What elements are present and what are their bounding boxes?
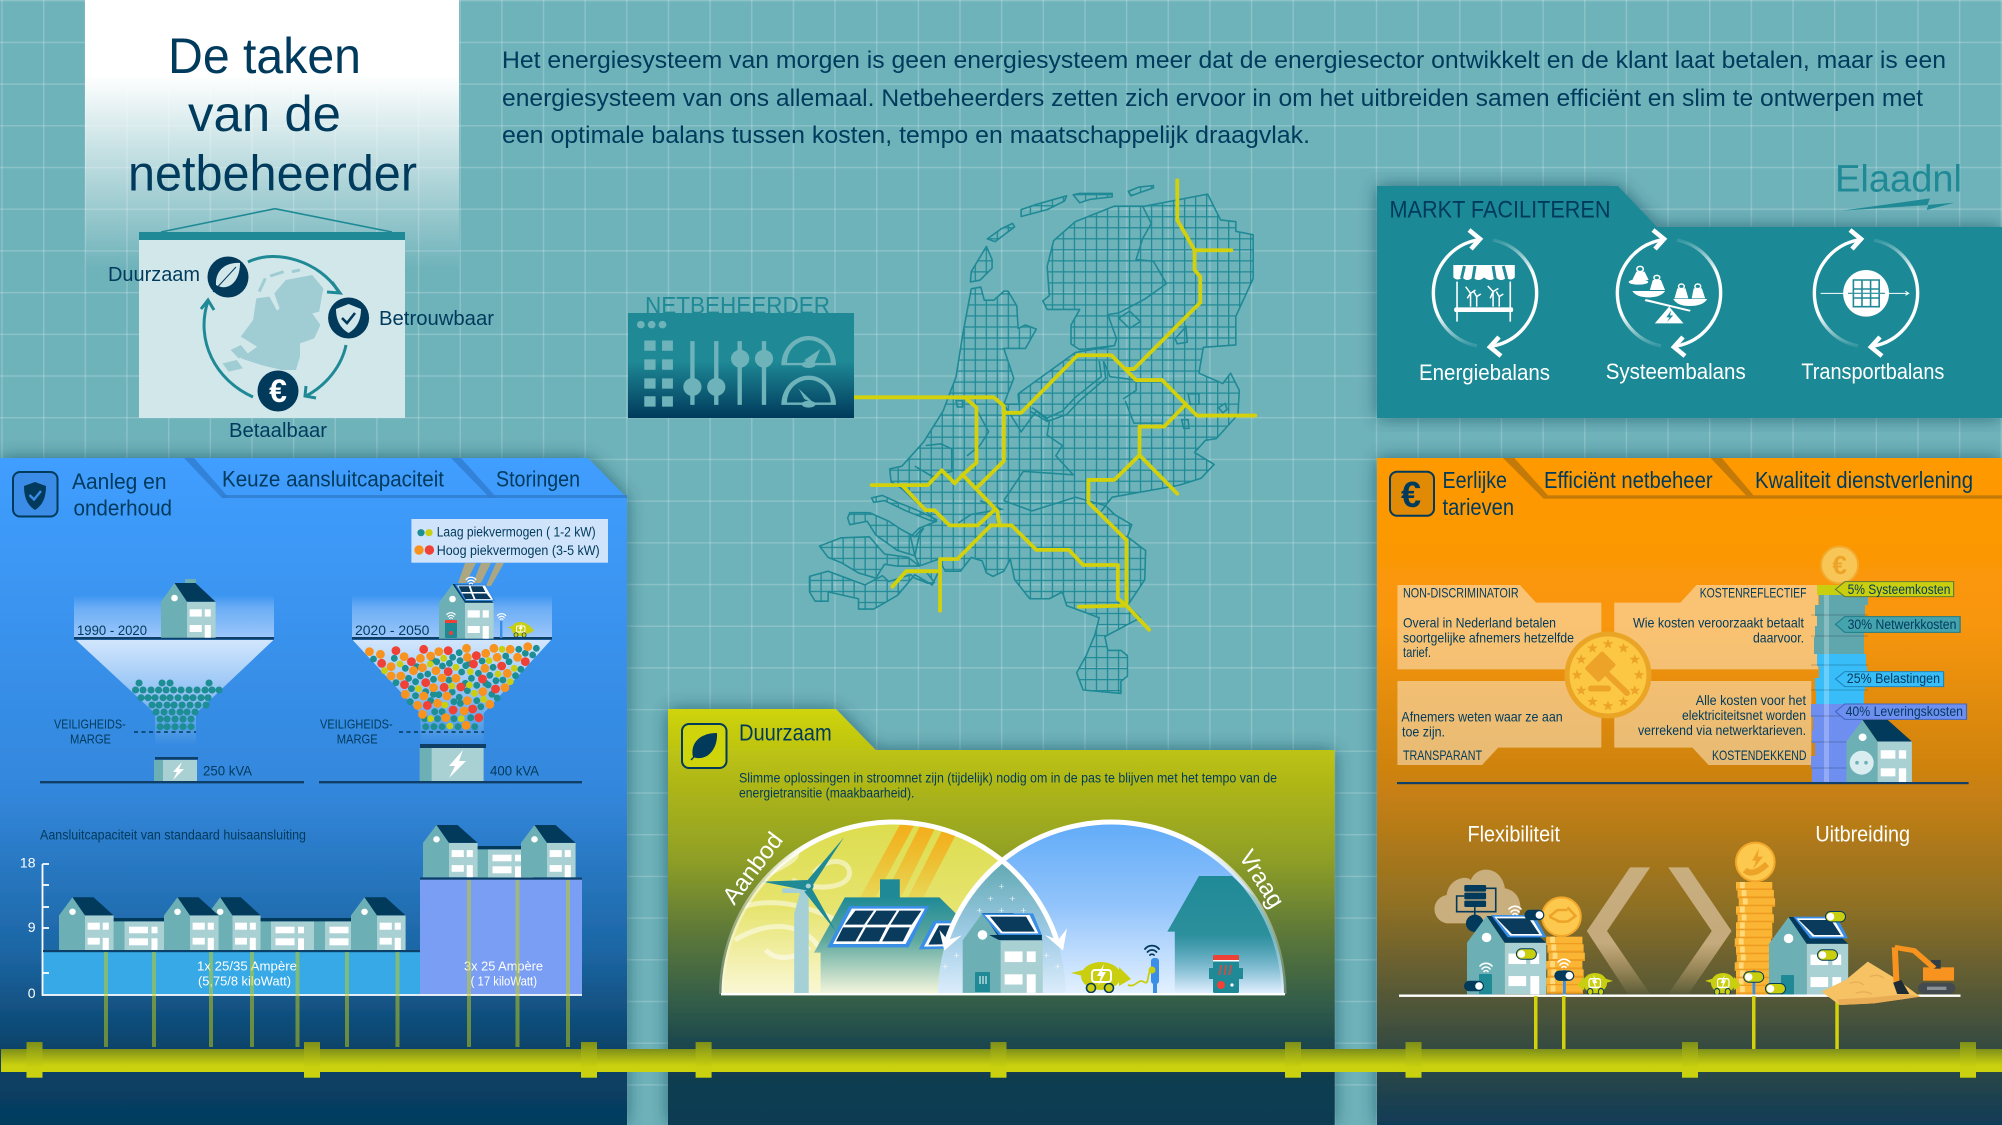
labels: 400 kVA — [490, 762, 540, 778]
left house heater and charger — [1479, 959, 1613, 996]
body text: Slimme oplossingen in stroomnet zijn (tijdelijk) nodig om in de pas te blijven met het tempo van de — [739, 770, 1277, 786]
bar: 3x 25 Ampere: 3x 25 Ampère — [464, 959, 543, 974]
house with socket — [1846, 720, 1912, 783]
cost labels: 40% Leveringskosten — [1846, 704, 1963, 719]
dots — [136, 683, 219, 727]
icon: transportbalans grid — [1814, 230, 1918, 356]
logo: Elaadnl: Elaadnl — [1835, 158, 1962, 200]
labels: Transportbalans — [1801, 359, 1944, 384]
card: kostendekkend: verrekend via netwerktarieven. — [1638, 722, 1806, 738]
tab headings: Kwaliteit dienstverlening — [1755, 467, 1973, 493]
chart: aansluitcapaciteit — [20, 825, 582, 1047]
tab shading — [1503, 458, 2002, 499]
dome overlap — [938, 864, 1065, 993]
large house silhouette — [1167, 876, 1294, 993]
title panel — [85, 0, 459, 268]
axis — [20, 854, 582, 1001]
labels — [320, 622, 540, 778]
car and charger — [1071, 946, 1159, 994]
title heading: netbeheerder — [128, 146, 417, 202]
labels: VEILIGHEIDS- — [320, 717, 393, 732]
intro text: Het energiesysteem van morgen is geen energiesysteem meer dat de energiesector ontwikkelt en de klant laat betalen, maar is een — [502, 47, 1946, 74]
underground pipe — [1, 1042, 2002, 1078]
card: non-discriminatoir: tarief. — [1403, 644, 1431, 660]
dome arcs and arrows — [721, 822, 1285, 995]
panel: markt faciliteren — [1377, 186, 2002, 418]
sand pile and excavator — [1821, 947, 1955, 1005]
card: kostendekkend: elektriciteitsnet worden — [1682, 707, 1806, 723]
house with solar roof — [814, 879, 959, 993]
Netherlands grid map — [810, 185, 1253, 693]
card: kostendekkend — [1638, 692, 1806, 763]
tab headings: Efficiënt netbeheer — [1544, 467, 1713, 493]
tab headings: onderhoud — [74, 496, 172, 520]
icon: leaf — [208, 256, 248, 298]
labels: 2020 - 2050 — [355, 622, 430, 638]
tab headings: Aanleg en — [72, 469, 166, 494]
cloud with server — [1434, 870, 1520, 932]
intro text: energiesysteem van ons allemaal. Netbeheerders zetten zich ervoor in om het uitbreiden samen efficiënt en slim te ontwerpen met — [502, 85, 1923, 112]
top euro coin: € — [1832, 550, 1847, 580]
legend — [411, 519, 608, 586]
pipe flanges — [26, 1042, 1976, 1078]
icon: euro badge — [1390, 472, 1434, 516]
heater — [445, 613, 457, 638]
connectors — [1534, 996, 1839, 1049]
labels: MARGE — [337, 731, 378, 746]
dots — [369, 647, 536, 727]
chevrons and cloud — [1434, 843, 1775, 994]
labels: Duurzaam — [108, 264, 200, 286]
card: transparant: TRANSPARANT — [1403, 747, 1482, 763]
icon: cost stack — [1811, 546, 1868, 783]
card: non-discriminatoir: NON-DISCRIMINATOIR — [1403, 584, 1519, 600]
icon: gavel coin — [1564, 632, 1652, 718]
legend: Laag piekvermogen ( 1-2 kW) — [437, 524, 596, 540]
tab headings: Eerlijke — [1442, 467, 1507, 493]
card: transparant: Afnemers weten waar ze aan — [1401, 708, 1563, 724]
labels: 250 kVA — [203, 762, 253, 778]
axis: 18 — [20, 854, 36, 870]
icon: euro: € — [269, 373, 287, 409]
tab headings — [72, 466, 580, 520]
panel: eerlijke tarieven (orange) — [1377, 458, 2002, 1125]
cycle arrows — [201, 257, 346, 398]
right coin stack — [1735, 843, 1775, 994]
card: non-discriminatoir: Overal in Nederland betalen — [1403, 614, 1556, 630]
panel: duurzaam (olive) — [668, 709, 1335, 1125]
house diagram: duurzaam, betrouwbaar, betaalbaar — [108, 209, 494, 442]
axis: 0 — [28, 985, 36, 1001]
flexibiliteit vs uitbreiding — [1399, 822, 1960, 1049]
labels — [108, 264, 494, 442]
tab headings: tarieven — [1442, 494, 1514, 520]
wind turbine — [762, 837, 844, 993]
labels: Energiebalans — [1419, 360, 1550, 385]
right house — [1705, 917, 1848, 996]
funnel 2020-2050 — [319, 577, 582, 783]
curved labels — [717, 827, 1290, 913]
heater — [1209, 955, 1243, 993]
panel: netbeheerder control desk — [628, 292, 854, 418]
card: kostendekkend: Alle kosten voor het — [1696, 692, 1806, 708]
car and charger — [497, 614, 534, 638]
transformer — [420, 744, 486, 781]
bar: 1x 25/35 Ampere: 1x 25/35 Ampère — [197, 959, 297, 974]
labels — [54, 622, 253, 778]
card: transparant — [1401, 708, 1563, 763]
bar: 3x 25 Ampere — [420, 879, 582, 994]
labels — [1419, 359, 1944, 385]
small Netherlands map — [222, 270, 323, 372]
labels: VEILIGHEIDS- — [54, 717, 126, 732]
labels: MARGE — [70, 731, 111, 746]
bar: 3x 25 Ampere: ( 17 kiloWatt) — [471, 974, 537, 989]
labels: 1990 - 2020 — [77, 622, 147, 638]
bar: 1x 25/35 Ampere: (5,75/8 kiloWatt) — [198, 974, 291, 989]
cards — [1397, 585, 1818, 765]
tab headings: Storingen — [496, 466, 580, 492]
card: non-discriminatoir: soortgelijke afnemers hetzelfde — [1403, 630, 1574, 646]
card: kostenreflectief — [1633, 584, 1806, 646]
icon: euro — [258, 370, 298, 412]
card: transparant: toe zijn. — [1402, 724, 1445, 740]
axis: 9 — [28, 919, 36, 935]
curved labels: Vraag — [1233, 845, 1290, 913]
panel: aanleg en onderhoud (blue) — [0, 458, 627, 1125]
title heading — [128, 28, 417, 202]
labels: Betrouwbaar — [379, 308, 494, 330]
street of 3x houses — [423, 825, 576, 878]
cost labels — [1836, 582, 1967, 719]
intro text: een optimale balans tussen kosten, tempo en maatschappelijk draagvlak. — [502, 122, 1310, 149]
dome: vraag — [936, 818, 1294, 996]
cost labels: 5% Systeemkosten — [1848, 582, 1950, 597]
icon: euro badge: € — [1401, 474, 1421, 515]
headings — [1468, 822, 1910, 846]
headings: Flexibiliteit — [1468, 822, 1560, 846]
chimney and house — [161, 579, 216, 638]
bar: 1x 25/35 Ampere — [43, 951, 420, 994]
body text: energietransitie (maakbaarheid). — [739, 786, 914, 800]
legend: Hoog piekvermogen (3-5 kW) — [437, 543, 600, 558]
icon: systeembalans scale — [1617, 230, 1721, 356]
sun rays — [860, 825, 955, 898]
middle house with solar panel — [963, 913, 1043, 993]
ground line — [1399, 994, 1960, 997]
card: kostenreflectief: daarvoor. — [1753, 630, 1804, 646]
funnel 1990-2020 — [40, 579, 304, 783]
intro text — [502, 47, 1946, 149]
labels: Betaalbaar — [229, 420, 327, 442]
tab shading — [184, 458, 627, 498]
curved labels: Aanbod — [717, 827, 789, 910]
dome: aanbod — [722, 824, 998, 993]
card: kostendekkend: KOSTENDEKKEND — [1712, 747, 1806, 763]
panel heading: MARKT FACILITEREN — [1390, 196, 1610, 224]
connector lines — [104, 880, 570, 1047]
transformer — [154, 757, 198, 781]
icon: shield badge — [13, 472, 58, 516]
cost labels: 30% Netwerkkosten — [1848, 617, 1956, 632]
left coin stack — [1542, 897, 1585, 994]
body text — [739, 770, 1277, 800]
icon: shield — [328, 298, 369, 338]
title heading: De taken — [168, 28, 361, 84]
card: kostenreflectief: Wie kosten veroorzaakt betaalt — [1633, 614, 1804, 630]
panel: netbeheerder control desk: NETBEHEERDER — [645, 292, 830, 320]
yellow grid lines — [854, 180, 1255, 630]
house with solar panel — [439, 577, 494, 639]
card: kostenreflectief: KOSTENREFLECTIEF — [1700, 584, 1806, 600]
icon: energiebalans market stall — [1433, 230, 1537, 356]
street of 1x houses — [59, 897, 406, 950]
wind swirls — [735, 847, 850, 957]
tab headings: Keuze aansluitcapaciteit — [222, 466, 444, 492]
tab headings — [1442, 467, 1973, 520]
icon: leaf badge — [682, 724, 726, 768]
toggles — [1464, 910, 1846, 994]
cost labels: 25% Belastingen — [1847, 671, 1940, 686]
left house — [1467, 906, 1547, 994]
card: non-discriminatoir — [1403, 584, 1574, 660]
top euro coin — [1821, 546, 1858, 584]
headings: Uitbreiding — [1815, 822, 1910, 846]
title heading: van de — [188, 86, 341, 142]
heading: Duurzaam — [739, 720, 832, 746]
labels: Systeembalans — [1606, 359, 1746, 384]
chart title: Aansluitcapaciteit van standaard huisaansluiting — [40, 827, 306, 842]
